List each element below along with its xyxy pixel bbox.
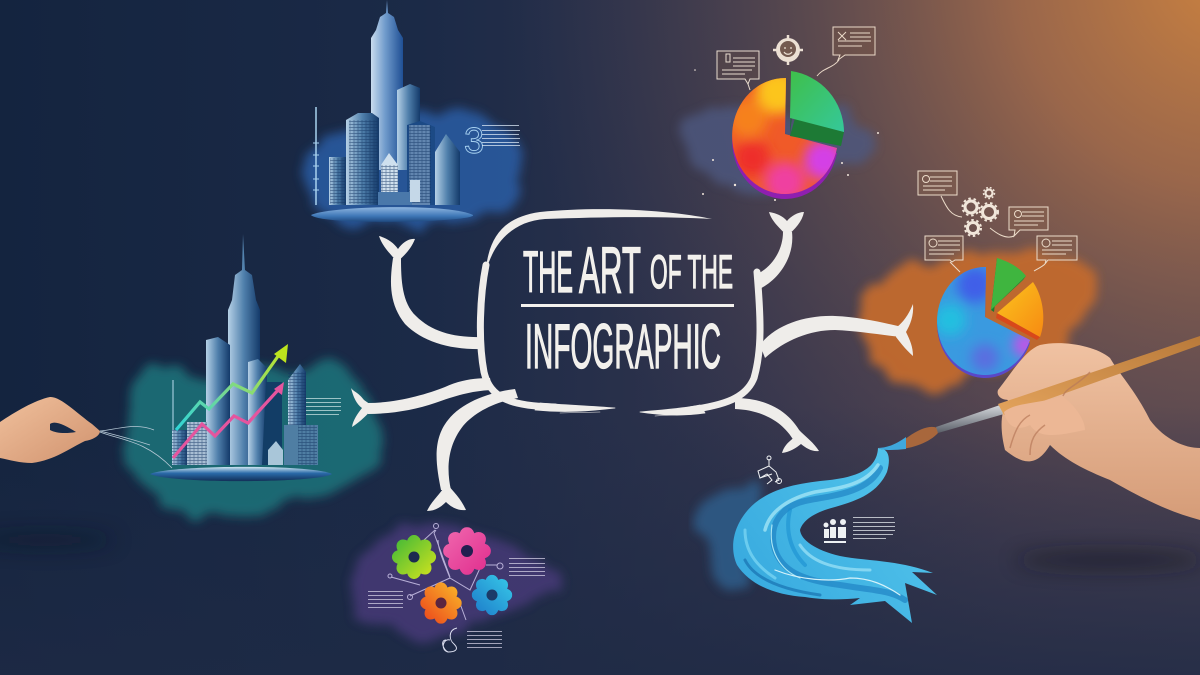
hand finger shading [1010, 372, 1090, 455]
panel: orange cloud pie chart [858, 171, 1098, 386]
pie rim [732, 83, 837, 199]
tiny text lines [482, 126, 520, 146]
callout right [817, 27, 875, 76]
orange paint cloud [858, 250, 1098, 386]
connector lines [388, 524, 503, 620]
callout left [717, 51, 759, 90]
blue paint shadow cloud [701, 485, 760, 591]
title frame and branches [351, 209, 913, 511]
callout middle right [990, 207, 1048, 237]
pie main slice [937, 267, 1030, 375]
hand holding paintbrush [878, 336, 1200, 520]
tiny text lines [368, 558, 545, 648]
main tower [313, 0, 460, 205]
branch upper right [755, 212, 804, 290]
blue-grey cloud [681, 105, 869, 190]
tiny text lines [853, 518, 895, 538]
stream highlights [745, 465, 905, 600]
hand pulling threads [0, 397, 172, 468]
branch lower right [735, 398, 819, 453]
icon: scribble knot [443, 628, 457, 652]
title divider [521, 304, 734, 307]
hand back [998, 343, 1200, 520]
towers [172, 234, 318, 465]
title: THE [523, 240, 573, 305]
panel: flowers [348, 521, 554, 652]
branch lower left [427, 389, 518, 511]
blue paint cloud [302, 111, 517, 227]
platform [150, 467, 332, 481]
pie orange slice [996, 282, 1043, 340]
teal paint cloud [126, 362, 378, 512]
callout top left [918, 171, 962, 217]
callout lower left [925, 236, 963, 272]
pie green slice [790, 71, 844, 146]
icon: network figure [758, 456, 782, 484]
brush bristles [878, 427, 938, 450]
brush frame [480, 209, 760, 416]
icon: gears [962, 188, 998, 236]
tiny text lines [306, 398, 341, 414]
icon: gear badge [773, 35, 803, 65]
flower pink [442, 526, 492, 576]
star specks [694, 69, 879, 201]
hand thumb [1004, 396, 1085, 435]
pie main slice [732, 78, 837, 194]
panel: blue skyscraper city [302, 0, 520, 227]
panel: coloured pie chart [681, 27, 879, 202]
callout lower right [1034, 236, 1077, 271]
flower green [391, 534, 437, 580]
brush handle [998, 336, 1200, 415]
panel: teal city with chart [126, 234, 378, 512]
pie green slice [991, 258, 1026, 312]
brush ferrule [936, 405, 1004, 433]
line chart green arrow [176, 344, 288, 430]
branch upper left [379, 236, 484, 349]
flower blue [471, 574, 513, 616]
title: ART [579, 233, 641, 307]
numeral three: 3 [464, 120, 484, 161]
pie rim [937, 270, 1030, 378]
purple paint cloud [348, 521, 554, 638]
branch left [351, 378, 492, 427]
branch right [760, 304, 913, 358]
line chart pink arrow [173, 382, 284, 458]
icon: people bars [824, 519, 846, 543]
platform [311, 207, 473, 222]
flower orange [419, 581, 463, 625]
infographic canvas: OF THE [650, 245, 733, 298]
infographic canvas: INFOGRAPHIC [525, 312, 721, 382]
paint stream [701, 448, 937, 623]
title [521, 233, 734, 382]
stream body [733, 448, 937, 623]
